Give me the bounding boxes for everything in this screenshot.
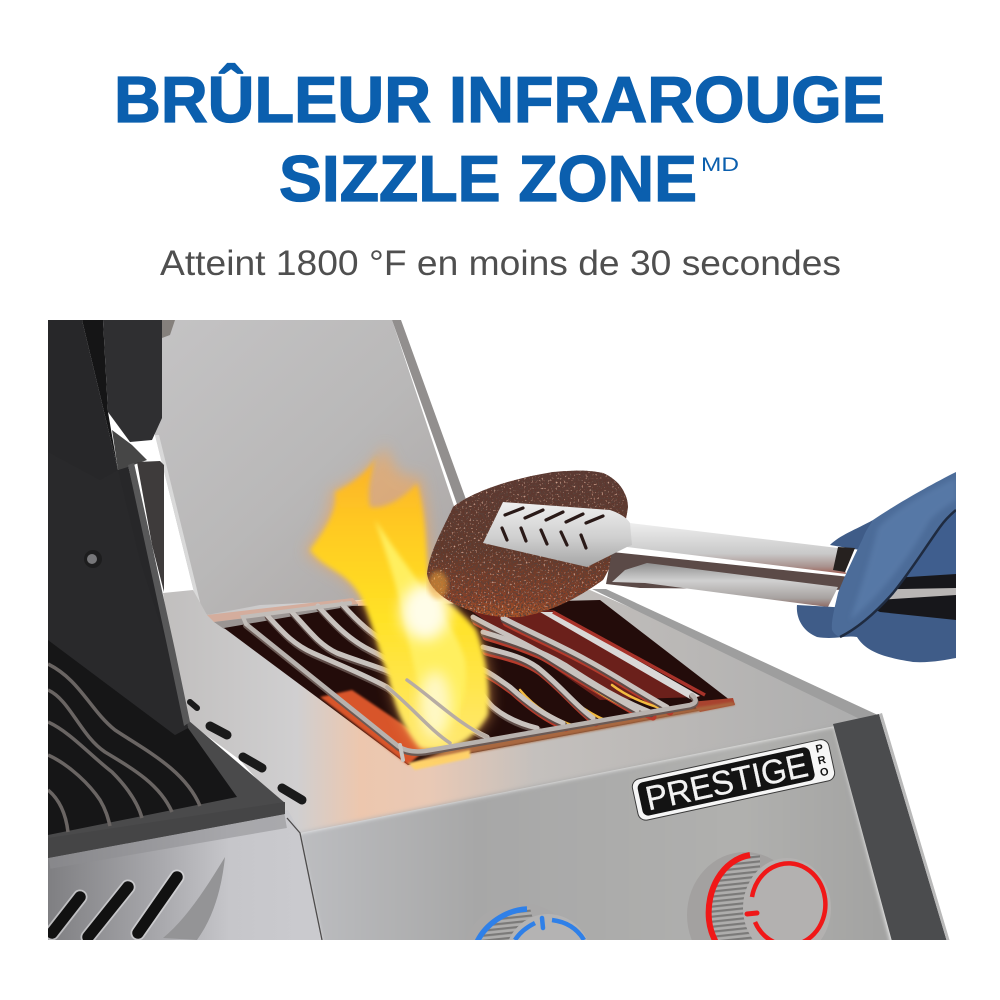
subtitle: Atteint 1800 °F en moins de 30 secondes [160,244,841,283]
title: MD [701,155,739,176]
badge: Prestige Pro: P [815,742,824,756]
title [114,63,885,215]
badge: Prestige Pro: R [817,754,827,767]
glove: palm behind handle [906,512,956,578]
knob: blue [475,906,587,940]
glove: tong handle in hand [878,574,956,620]
tong slots [502,508,603,548]
photo: grill with flaming steak [48,320,956,1000]
main grill: raised dark lid [48,320,190,735]
deck vents [190,702,302,800]
tongs and glove [483,472,956,662]
grate frame [243,603,696,760]
main grill: dark firebox [48,640,285,858]
steel bars [268,606,668,745]
steel deck [163,590,880,833]
lower tong shadow gap [606,552,860,590]
glove: upper finger and cuff [830,520,873,550]
badge: Prestige Pro: PRESTIGE [642,746,812,818]
deck back edge [592,589,880,720]
front control panel [298,726,892,945]
lid bolt [84,550,102,568]
grate bars [267,604,670,745]
flames [305,445,490,752]
burner opening [224,600,735,770]
grate bars in front of flame [387,680,487,743]
infographic page [48,62,956,940]
red reflections [476,622,670,728]
title: BRÛLEUR INFRAROUGE [114,63,885,136]
glove: lower hand [797,605,956,662]
badge: Prestige Pro: O [819,766,830,779]
knob: red [687,852,831,940]
upper tong arm [627,523,846,574]
side shelf lid [155,320,472,615]
steak [427,471,628,617]
dark side frame [833,714,948,945]
tong paddle [483,502,632,567]
title: SIZZLE ZONE [279,142,697,215]
lower tong arm [612,563,838,607]
left panel below grill [48,810,322,945]
